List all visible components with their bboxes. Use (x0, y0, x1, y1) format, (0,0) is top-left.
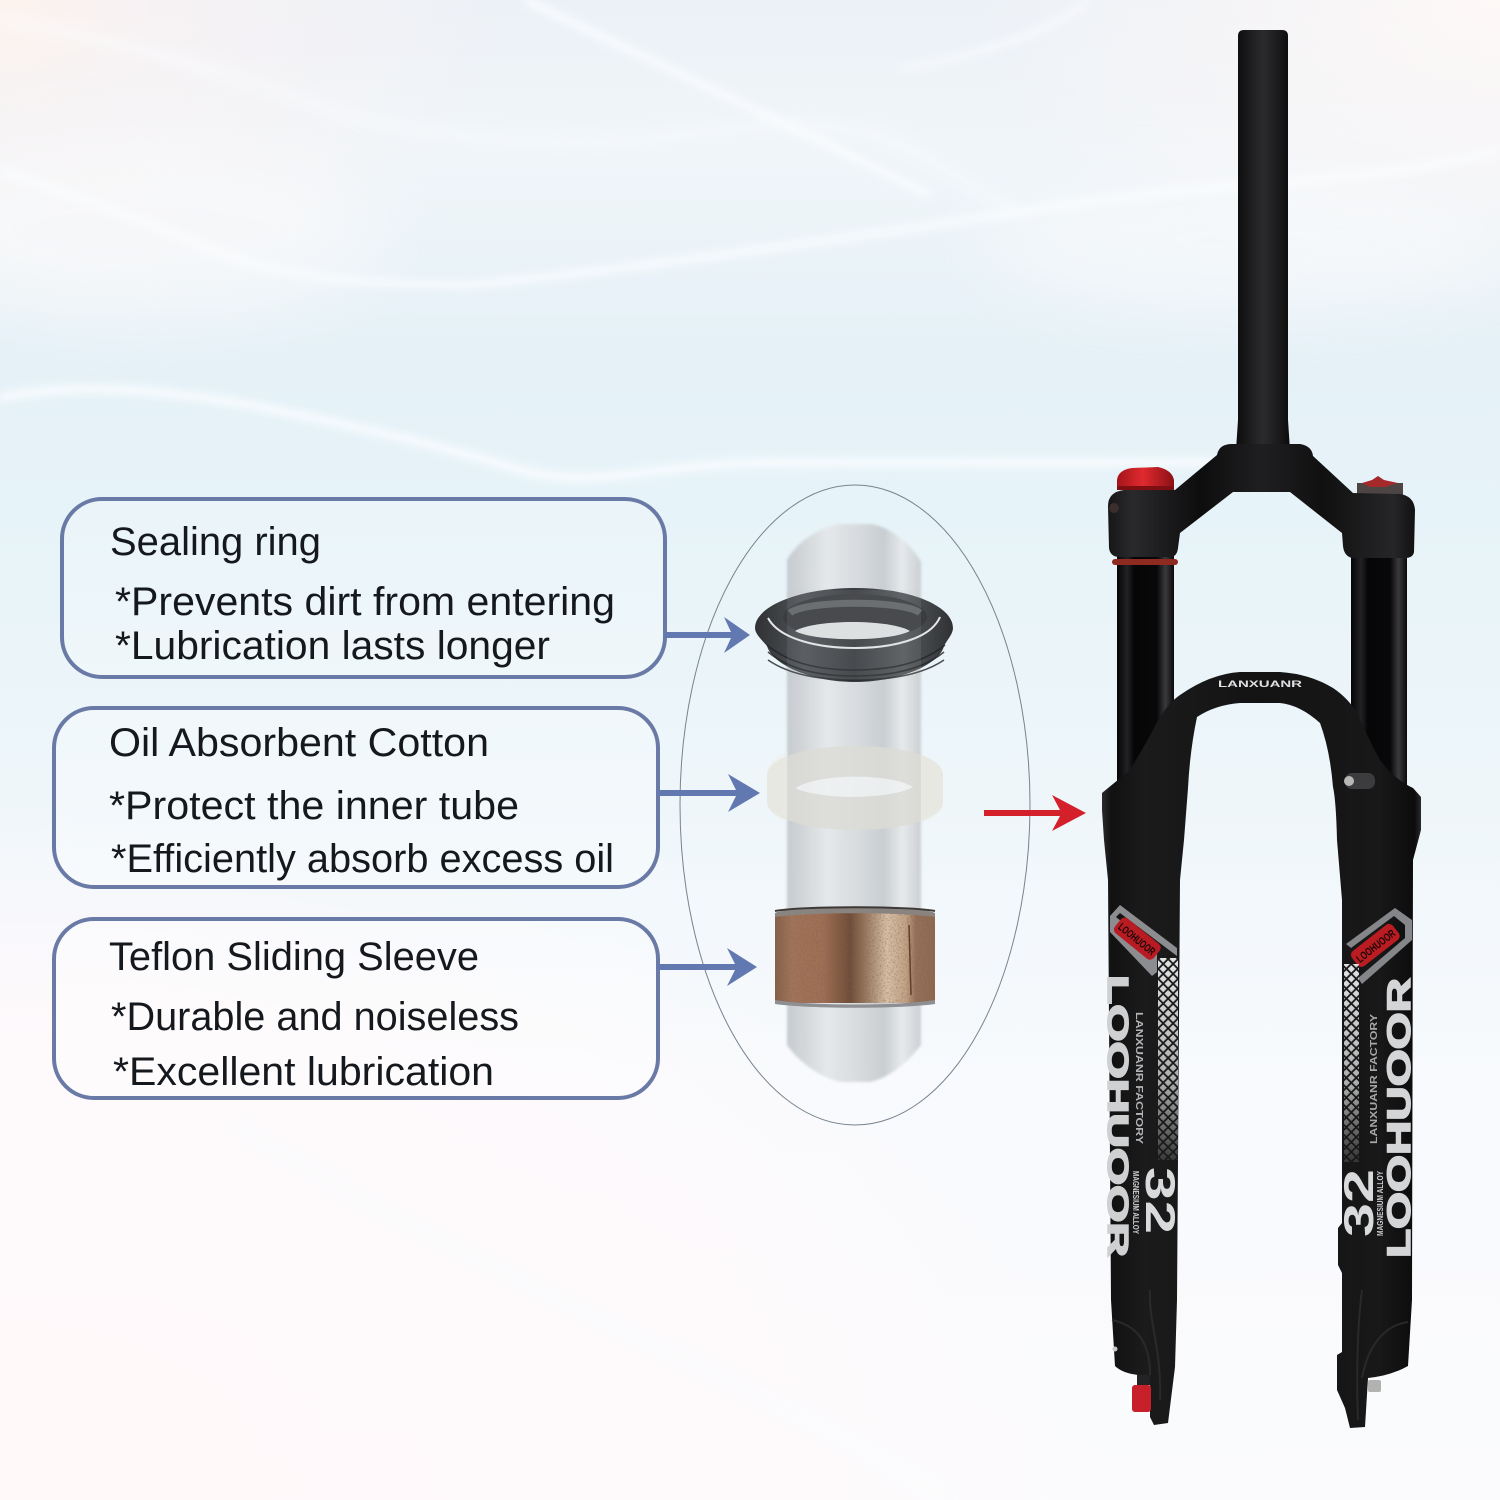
knob neck (1137, 1375, 1150, 1385)
heading: teflon sliding sleeve: Teflon Sliding Sleeve (109, 935, 479, 979)
red badge (1112, 915, 1163, 962)
chevron (1110, 905, 1177, 976)
dot pattern (1344, 964, 1359, 1162)
right stanchion (1351, 555, 1407, 800)
red badge: LOOHUOOR (1115, 921, 1157, 958)
panel: sealing ring (62, 499, 665, 677)
detail ellipse (680, 485, 1030, 1125)
arrow: cotton (658, 774, 760, 812)
text: lubrication lasts: *Lubrication lasts longer (115, 624, 550, 668)
text: protect inner tube: *Protect the inner tube (109, 784, 519, 828)
left red cap (1117, 467, 1174, 490)
dot pattern (1158, 958, 1178, 1160)
crown bolt (1109, 503, 1119, 513)
text: excellent lubrication: *Excellent lubrication (113, 1050, 494, 1094)
fork size: 32 (1137, 1167, 1184, 1234)
big brand: LOOHUOOR (1381, 978, 1417, 1258)
left leg decals (1107, 905, 1178, 1258)
red badge: LOOHUOOR (1354, 928, 1398, 965)
text: absorb excess oil: *Efficiently absorb excess oil (111, 837, 614, 881)
crown (1108, 444, 1415, 558)
big brand: LOOHUOOR (1101, 975, 1133, 1257)
heading: oil absorbent cotton: Oil Absorbent Cotton (109, 721, 489, 765)
red badge (1349, 922, 1402, 969)
factory line: LANXUANR FACTORY (1133, 1012, 1144, 1144)
lowers and arch (1102, 672, 1421, 1428)
suspension fork (1101, 30, 1421, 1428)
translucent tube (787, 524, 921, 1082)
text: durable and noiseless: *Durable and noiseless (111, 995, 519, 1039)
arch brand: LANXUANR (1218, 679, 1303, 689)
logo screw (1112, 1346, 1118, 1352)
red rebound knob (1132, 1385, 1151, 1412)
chevron (1346, 908, 1412, 984)
material: MAGNESIUM ALLOY (1131, 1171, 1140, 1235)
rebound bolt (1344, 773, 1375, 789)
axle bolt (1368, 1380, 1381, 1392)
icon: oil absorbent cotton ring (767, 746, 943, 830)
panel: oil absorbent cotton (54, 708, 658, 887)
heading: sealing ring: Sealing ring (110, 520, 321, 564)
leg contour highlights (1112, 1290, 1408, 1420)
fork size: 32 (1335, 1169, 1382, 1237)
left stanchion (1117, 555, 1174, 800)
right leg decals (1344, 908, 1412, 1256)
arrow: red (984, 795, 1086, 831)
material: MAGNESIUM ALLOY (1376, 1170, 1385, 1236)
panel: teflon sliding sleeve (54, 919, 658, 1098)
icon: teflon sliding sleeve (775, 907, 935, 1008)
steerer tube (1236, 30, 1290, 450)
arrow: sleeve (658, 948, 757, 986)
right air valve cap (1357, 476, 1403, 496)
icon: sealing ring part (755, 588, 953, 682)
text: prevents dirt: *Prevents dirt from entering (115, 580, 615, 624)
factory line: LANXUANR FACTORY (1369, 1014, 1380, 1144)
arrow: sealing ring (665, 617, 750, 653)
red seal ring (1112, 559, 1178, 565)
